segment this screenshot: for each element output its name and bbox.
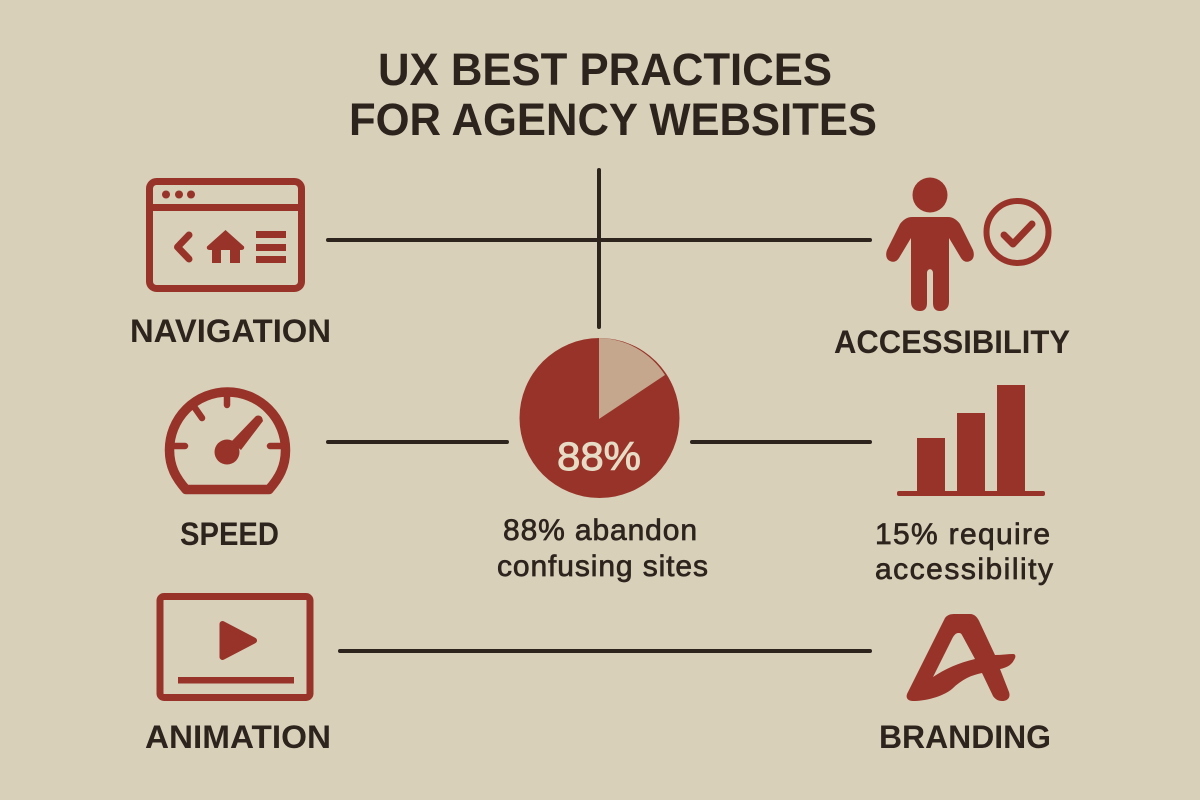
bar chart	[897, 385, 1045, 496]
text: 88% abandon confusing sites	[497, 514, 708, 583]
icon: browser window navigation	[149, 182, 302, 288]
icon: video player	[160, 596, 310, 698]
icon: speedometer	[170, 392, 286, 490]
label: speed: SPEED	[180, 516, 279, 552]
pie chart: 88%: 88%	[557, 435, 641, 479]
icon: branding letter A	[907, 614, 1015, 701]
title: UX BEST PRACTICES	[378, 44, 832, 95]
connector lines	[328, 170, 870, 651]
title	[349, 44, 877, 145]
title: FOR AGENCY WEBSITES	[349, 94, 877, 145]
text: 15% require accessibility: 15% require	[875, 518, 1050, 551]
label: animation: ANIMATION	[145, 719, 331, 755]
label: branding: BRANDING	[879, 719, 1051, 755]
pie chart: 88%	[520, 338, 680, 498]
text: 15% require accessibility	[875, 518, 1053, 586]
label: accessibility: ACCESSIBILITY	[834, 324, 1070, 360]
text: 15% require accessibility: accessibility	[875, 553, 1053, 586]
label: navigation: NAVIGATION	[130, 313, 331, 349]
icon: person with check mark	[886, 178, 1048, 311]
text: 88% abandon confusing sites: confusing sites	[497, 550, 708, 583]
text: 88% abandon confusing sites: 88% abandon	[503, 514, 697, 547]
